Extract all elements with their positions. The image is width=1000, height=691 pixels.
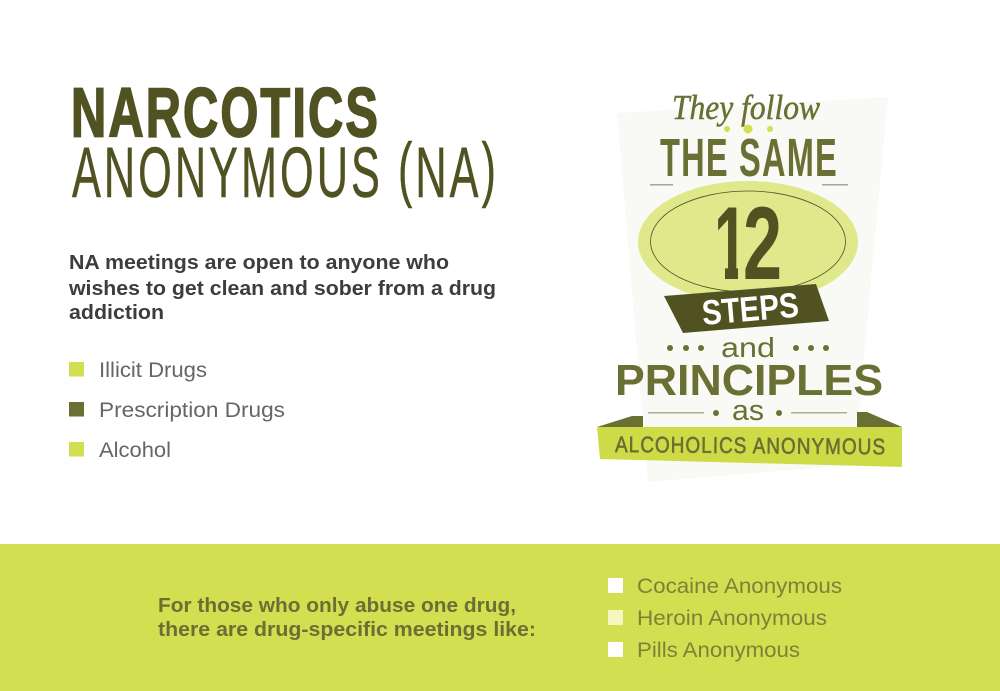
the same: THE SAME — [660, 128, 838, 188]
title: NARCOTICS — [71, 74, 380, 152]
poster background panel — [617, 97, 888, 482]
intro text: NA meetings are open to anyone who — [69, 252, 449, 274]
as row: as — [732, 395, 764, 427]
intro text: addiction — [69, 302, 164, 324]
and row: and — [721, 332, 775, 363]
poster: 12 steps — [597, 88, 902, 482]
bottom ribbon — [597, 412, 902, 467]
intro text: wishes to get clean and sober from a drug — [68, 278, 496, 300]
list: specific meetings: Pills Anonymous — [637, 639, 800, 662]
list: substances — [69, 359, 285, 462]
list: specific meetings — [608, 575, 842, 662]
list: substances: Alcohol — [99, 439, 171, 462]
band text: there are drug-specific meetings like: — [158, 619, 536, 641]
band text: For those who only abuse one drug, — [158, 595, 516, 617]
oval badge: 1 — [714, 186, 748, 302]
list: specific meetings: Cocaine Anonymous — [637, 575, 842, 598]
script heading: They follow — [672, 88, 821, 127]
list: specific meetings: Heroin Anonymous — [637, 607, 827, 630]
dots — [724, 124, 773, 134]
title: ANONYMOUS — [72, 134, 582, 213]
band text — [158, 595, 536, 641]
title: ) — [482, 130, 499, 209]
title — [71, 74, 499, 213]
title: ( — [398, 130, 415, 209]
list: substances: Illicit Drugs — [99, 359, 207, 382]
and row — [667, 332, 829, 363]
steps ribbon: STEPS — [700, 286, 800, 333]
bottom band — [0, 544, 1000, 691]
intro text — [68, 252, 496, 324]
oval badge: 2 — [743, 186, 782, 302]
title: NA — [415, 134, 482, 213]
principles: PRINCIPLES — [615, 356, 883, 405]
list: substances: Prescription Drugs — [99, 399, 285, 422]
bottom ribbon: ALCOHOLICS ANONYMOUS — [615, 432, 886, 459]
as row — [648, 395, 847, 427]
oval badge — [638, 181, 858, 303]
